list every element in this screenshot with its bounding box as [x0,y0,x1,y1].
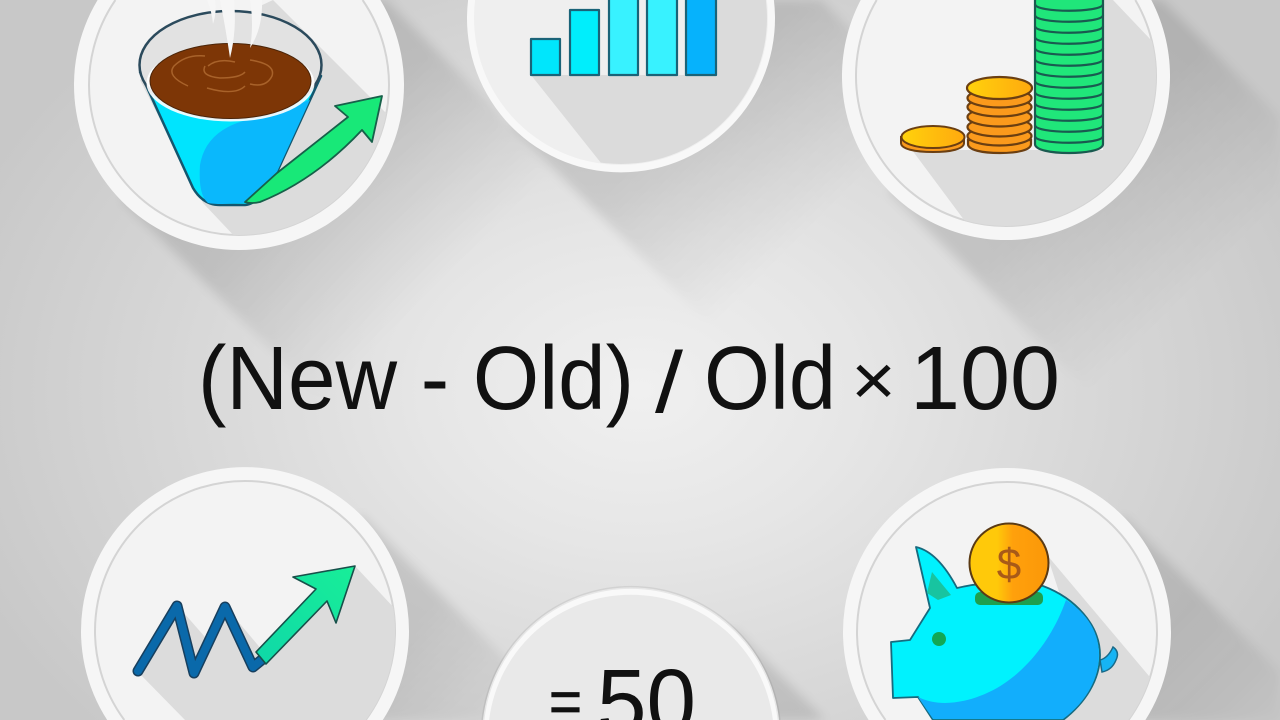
panel: piggy bank icon [843,468,1171,720]
icon: orange coin stack [967,77,1032,153]
formula heading [198,329,1060,431]
formula heading: (New - Old) [198,329,634,429]
icon: dollar coin: $ [997,540,1021,589]
panel: zigzag trend arrow icon [81,467,410,720]
icon: cup body [140,11,322,205]
panel: result circle [483,587,779,720]
icon: trend arrow [256,566,355,664]
panel: coffee cup with rising arrow [74,0,404,250]
formula heading: / [655,335,683,431]
icon: steam [207,0,262,58]
icon: pig eye [932,632,946,646]
icon: coffee surface [150,44,311,118]
icon: single coin [901,126,964,152]
icon: coin slot [975,592,1043,605]
bar chart [531,0,716,75]
icon: pig body [891,547,1100,720]
icon: dollar coin [970,524,1048,602]
icon: green coin stack [1035,0,1103,153]
icon: zigzag line [138,606,264,673]
panel: coin stacks icon [842,0,1170,240]
panel: bar chart icon [467,0,780,172]
result value [549,651,696,720]
icon: green arrow [245,96,382,203]
formula heading: 100 [910,329,1060,429]
formula heading: × [851,341,896,421]
icon: pig tail [1100,647,1117,672]
formula heading: Old [704,329,836,429]
